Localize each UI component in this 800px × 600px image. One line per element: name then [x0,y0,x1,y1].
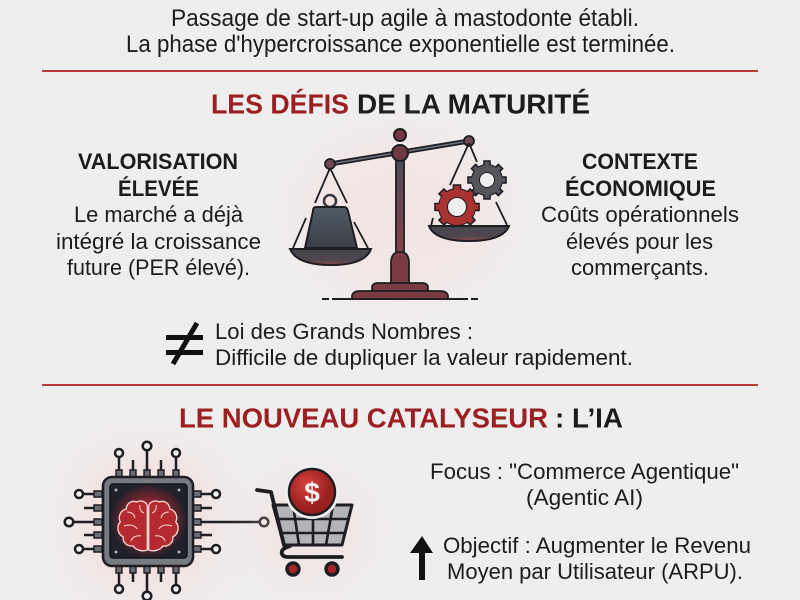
text block: objectif ARPU: Moyen par Utilisateur (ARPU). [447,559,743,584]
text block: loi des grands nombres: Difficile de dupliquer la valeur rapidement. [215,345,633,370]
text block: valorisation élevée: VALORISATION [78,149,238,174]
text block: contexte économique: CONTEXTE [582,149,698,174]
text block: contexte économique: élevés pour les [566,229,713,254]
wheels [287,563,299,575]
text block: valorisation élevée: ÉLEVÉE [118,176,199,201]
text block: valorisation élevée [56,149,261,280]
text block: loi des grands nombres [215,319,633,370]
ground line [322,298,478,300]
intro text: La phase d'hypercroissance exponentielle est terminée. [126,31,675,58]
text block: focus commerce agentique [430,459,739,510]
coin [285,465,339,519]
heading: le nouveau catalyseur: : L’IA [555,402,623,434]
icon: shopping cart with dollar coin: $ [304,477,320,508]
icon: balance scale [290,129,514,299]
pins [65,442,268,600]
text block: contexte économique: commerçants. [571,255,709,280]
heading: les défis de la maturité: DE LA MATURITÉ [357,88,590,120]
text block: contexte économique [541,149,739,280]
icon: AI chip with brain [65,442,268,600]
red gear [426,176,488,238]
text block: valorisation élevée: future (PER élevé). [67,255,250,280]
intro text: Passage de start-up agile à mastodonte établi. [171,5,639,32]
intro text [126,5,675,58]
icon: up arrow [410,536,433,580]
text block: loi des grands nombres: Loi des Grands Nombres : [215,319,473,344]
beam [330,141,469,164]
heading: les défis de la maturité [211,88,590,120]
text block: objectif ARPU [443,533,751,584]
grey gear [460,153,514,207]
text block: valorisation élevée: intégré la croissance [56,229,261,254]
right strings and gears [431,143,507,226]
cart frame [257,490,284,545]
text block: focus commerce agentique: Focus : "Commerce Agentique" [430,459,739,484]
text block: objectif ARPU: Objectif : Augmenter le Revenu [443,533,751,558]
brain [118,501,178,551]
heading: les défis de la maturité: LES DÉFIS [211,88,349,120]
cart basket [273,505,352,545]
text block: contexte économique: Coûts opérationnels [541,202,739,227]
text block: focus commerce agentique: (Agentic AI) [526,485,643,510]
text block: contexte économique: ÉCONOMIQUE [565,176,716,201]
text block: valorisation élevée: Le marché a déjà [74,202,243,227]
column [396,155,404,257]
icon: shopping cart with dollar coin [253,465,363,578]
icon: not equal [166,323,203,364]
heading: le nouveau catalyseur: LE NOUVEAU CATALYSEUR [179,402,548,434]
left strings and weight [293,168,368,248]
